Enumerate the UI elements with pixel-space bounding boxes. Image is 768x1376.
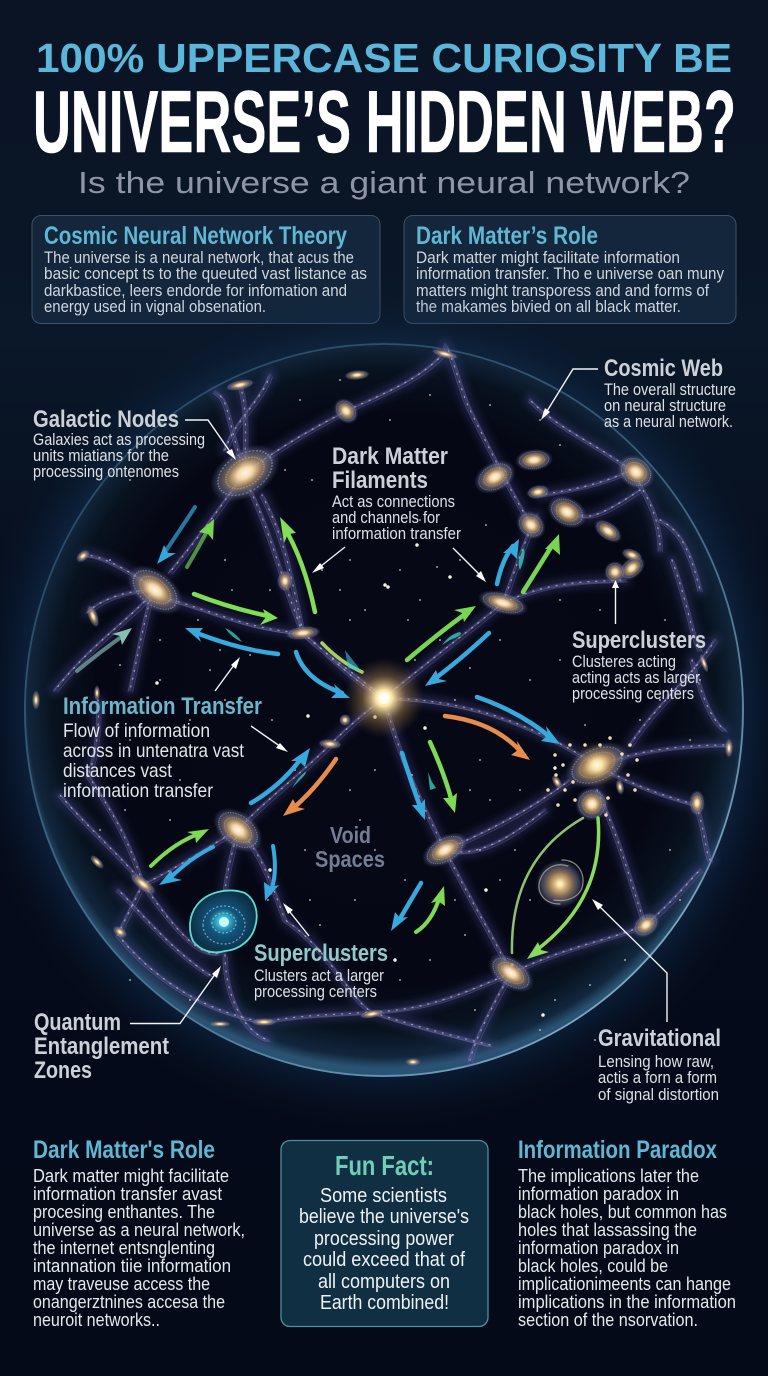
body text: The implications later the — [518, 1165, 699, 1186]
label: cosmic web: as a neural network. — [604, 413, 733, 431]
label: information transfer: across in untenatra vast — [63, 740, 245, 762]
body text: may traveuse access the — [33, 1273, 210, 1294]
lensing arc: green with arrow — [527, 818, 599, 959]
arrow: green — [523, 534, 560, 592]
arrow: superclusters leader — [612, 580, 619, 624]
label: gravitational lensing: Lensing how raw, — [598, 1053, 714, 1071]
label: galactic nodes: Galactic Nodes — [33, 406, 179, 433]
label: cosmic web: The overall structure — [604, 381, 736, 399]
arrow: blue — [402, 753, 425, 820]
arrow: lower superclusters leader — [283, 903, 309, 936]
body text: implications in the information — [518, 1291, 736, 1312]
body text — [299, 1184, 469, 1314]
label: dark matter filaments: Filaments — [332, 467, 428, 494]
label: galactic nodes: Galaxies act as processing — [33, 431, 205, 449]
body text: Dark matter might facilitate information — [416, 249, 680, 267]
label: gravitational lensing: Gravitational — [598, 1025, 721, 1052]
body text: information transfer avast — [33, 1183, 222, 1204]
label: cosmic web — [604, 355, 736, 431]
arrows: information flow — [77, 507, 599, 959]
arrow: orange — [445, 716, 530, 760]
arrow: teal — [77, 628, 132, 671]
arrow: green — [280, 517, 315, 612]
arrow: yellow-cyan — [322, 643, 362, 672]
arrow: blue — [296, 652, 350, 698]
cosmic sphere glow — [0, 290, 768, 1130]
label: information transfer: Information Transfer — [63, 693, 262, 720]
arrow: gravitational leader — [592, 899, 667, 1022]
body text: section of the nsorvation. — [518, 1309, 698, 1330]
body text: could exceed that of — [303, 1248, 465, 1271]
body text: the makames bivied on all black matter. — [416, 298, 681, 316]
arrow: blue — [391, 883, 421, 931]
label: dark matter filaments: and channels for — [332, 509, 440, 527]
label: gravitational lensing — [598, 1025, 721, 1104]
arrow: filaments to node leader — [453, 548, 486, 582]
label: superclusters right: acting acts as larger — [572, 669, 700, 687]
label: superclusters lower: processing centers — [254, 983, 377, 1001]
heading: Cosmic Neural Network Theory — [44, 222, 347, 250]
label: dark matter filaments: information transfer — [332, 525, 461, 543]
arrow: information transfer up — [215, 657, 240, 691]
label: galactic nodes — [33, 406, 205, 481]
label: quantum entanglement zones: Zones — [34, 1057, 92, 1084]
arrow: orange — [283, 759, 336, 816]
arrow: green — [194, 594, 278, 625]
background stars — [100, 380, 700, 1040]
label: void spaces — [315, 822, 385, 872]
panel: cosmic neural network theory — [32, 216, 380, 324]
arrow: blue — [264, 846, 279, 901]
label: information transfer: distances vast — [63, 760, 173, 782]
cosmic sphere — [24, 343, 744, 1077]
body text — [518, 1165, 736, 1330]
arrow: quantum leader — [130, 966, 221, 1024]
label: dark matter filaments: Dark Matter — [332, 443, 448, 470]
panel: fun fact — [281, 1140, 488, 1326]
body text: believe the universe's — [299, 1205, 469, 1228]
arrow: blue — [425, 633, 489, 686]
body text: Earth combined! — [320, 1291, 449, 1314]
heading: Dark Matter’s Role — [416, 222, 598, 250]
filament network — [53, 345, 732, 1062]
quantum entanglement zone — [190, 890, 257, 952]
label: cosmic web: Cosmic Web — [604, 355, 723, 382]
arrow: information transfer right — [251, 726, 288, 752]
cluster dots around supercluster — [548, 738, 637, 815]
arrow: blue — [157, 507, 195, 564]
panel: information paradox — [518, 1136, 736, 1330]
arrow: green — [151, 829, 209, 866]
label: superclusters lower: Superclusters — [254, 940, 388, 967]
teal sparks — [225, 548, 524, 790]
body text: intannation tiie information — [33, 1255, 231, 1276]
title: 100% UPPERCASE CURIOSITY BE — [36, 35, 732, 81]
body text: information transfer. Tho e universe oan muny — [416, 265, 725, 283]
label: galactic nodes: processing ontenomes — [33, 463, 179, 481]
label: dark matter filaments: Act as connections — [332, 493, 455, 511]
body text: the internet entsnglenting — [33, 1237, 215, 1258]
label: superclusters lower: Clusters act a larger — [254, 967, 384, 985]
body text: neuroit networks.. — [33, 1309, 160, 1330]
label: information transfer: Flow of information — [63, 720, 210, 742]
body text: procesing enthantes. The — [33, 1201, 215, 1222]
label: information transfer: information transfer — [63, 780, 213, 802]
body text: all computers on — [318, 1270, 450, 1293]
label: galactic nodes: units miatians for the — [33, 447, 169, 465]
arrow: green — [430, 742, 457, 813]
subtitle: Is the universe a giant neural network? — [78, 165, 690, 200]
arrow: green — [416, 886, 445, 932]
body text: matters might transporess and and forms of — [416, 282, 709, 300]
label: quantum entanglement zones: Entanglement — [34, 1033, 169, 1060]
arrow: green — [187, 519, 214, 567]
body text: energy used in vignal obsenation. — [44, 298, 266, 316]
label: superclusters right: processing centers — [572, 685, 694, 703]
label: gravitational lensing: actis a forn a form — [598, 1069, 717, 1087]
label: cosmic web: on neural structure — [604, 397, 726, 415]
body text: basic concept ts to the queuted vast listance as — [44, 265, 367, 283]
body text: black holes, could be — [518, 1255, 668, 1276]
label: quantum entanglement zones: Quantum — [34, 1009, 121, 1036]
heading: Information Paradox — [518, 1136, 717, 1164]
body text: information paradox in — [518, 1237, 679, 1258]
body text: implicationimeents can hange — [518, 1273, 731, 1294]
label: superclusters right: Superclusters — [572, 627, 706, 654]
body text: holes that lassassing the — [518, 1219, 697, 1240]
arrow: blue — [185, 628, 278, 654]
arrow: blue — [159, 847, 213, 885]
spiral galaxy — [536, 860, 584, 908]
body text — [33, 1165, 245, 1330]
body text — [416, 249, 725, 316]
body text: The universe is a neural network, that acus the — [44, 249, 354, 267]
arrow: galactic nodes leader — [185, 420, 236, 460]
label: quantum entanglement zones — [34, 1009, 169, 1084]
body text: processing power — [314, 1227, 454, 1250]
body text: black holes, but common has — [518, 1201, 727, 1222]
label: void spaces: Void — [330, 822, 371, 848]
arrow: green — [407, 606, 476, 660]
label: superclusters lower — [254, 940, 388, 1001]
heading: Dark Matter's Role — [33, 1136, 215, 1164]
label: gravitational lensing: of signal distortion — [598, 1086, 719, 1104]
label: superclusters right — [572, 627, 706, 703]
panel: dark matter's role bottom — [33, 1136, 245, 1330]
arrow: blue — [477, 697, 560, 744]
panel: dark matter's role top — [404, 216, 736, 324]
heading: Fun Fact: — [335, 1150, 434, 1181]
arrow: blue — [251, 748, 310, 803]
body text: information paradox in — [518, 1183, 679, 1204]
label: information transfer — [63, 693, 262, 802]
body text: darkbastice, leers endorde for infomation and — [44, 282, 347, 300]
arrow: cosmic web leader — [541, 369, 598, 420]
galaxies — [32, 347, 733, 1066]
label: superclusters right: Clusteres acting — [572, 653, 676, 671]
lensing arc: green thin — [512, 818, 583, 953]
arrow: filaments leader — [312, 547, 345, 573]
body text: onangerztnines accesa the — [33, 1291, 225, 1312]
body text: Some scientists — [320, 1184, 447, 1207]
label: void spaces: Spaces — [315, 846, 385, 872]
label: dark matter filaments — [332, 443, 461, 543]
body text: Dark matter might facilitate — [33, 1165, 229, 1186]
arrow: blue — [497, 539, 519, 584]
body text — [44, 249, 367, 316]
body text: universe as a neural network, — [33, 1219, 245, 1240]
